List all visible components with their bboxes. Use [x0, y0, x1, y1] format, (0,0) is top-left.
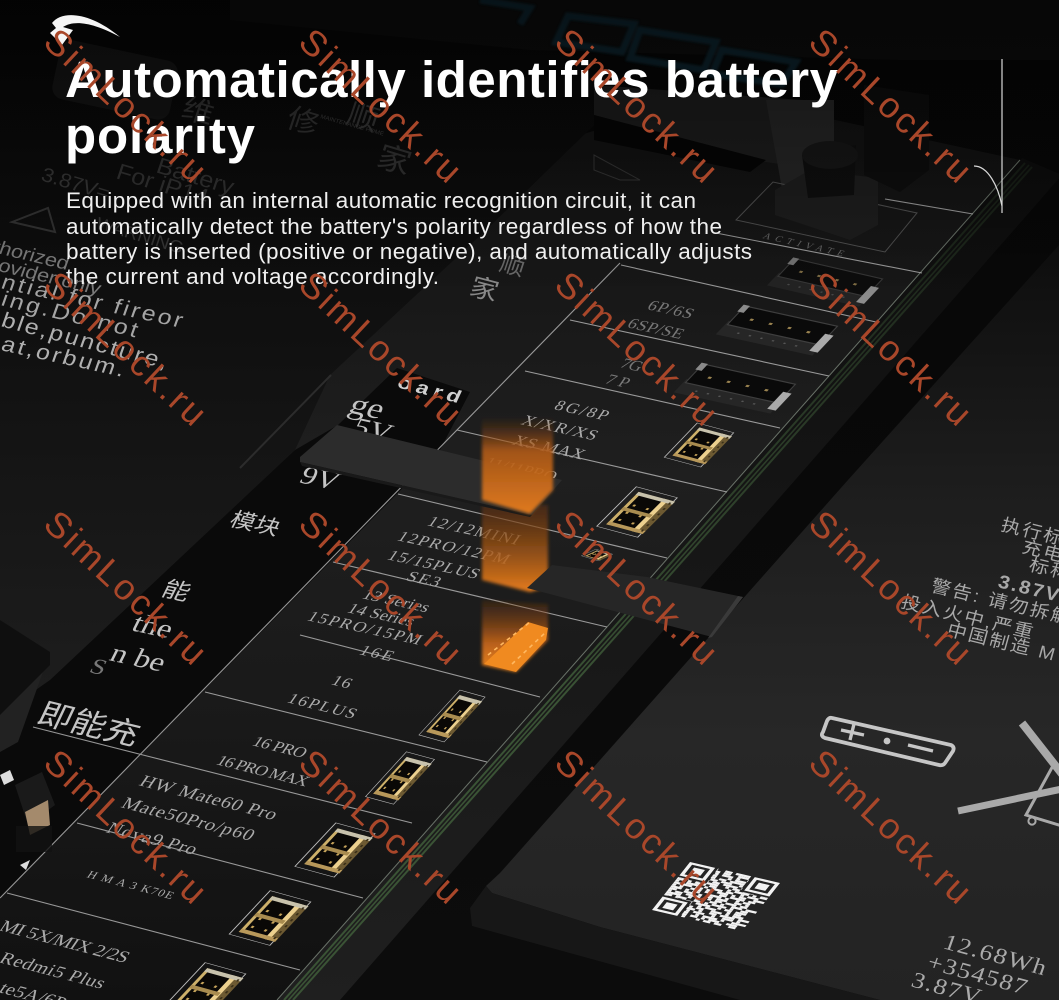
board text: phone model list: 16E — [356, 642, 398, 664]
watermark grid: SimLock.ru — [801, 263, 980, 434]
board text: phone model list: 16 PRO MAX — [213, 752, 313, 790]
connectors: gold battery sockets — [164, 423, 735, 1000]
icon: crossed-out bin — [958, 723, 1059, 826]
battery label: faint brand: Battery — [153, 153, 237, 200]
top fade over scene — [0, 0, 1059, 300]
panel: top device and display — [230, 0, 1059, 252]
button: activate — [736, 85, 929, 252]
board text: phone model list: 15PRO/15PM — [304, 608, 426, 648]
title: polarity — [65, 107, 256, 164]
panel: board side with green strip — [277, 158, 1059, 1000]
watermark grid: SimLock.ru — [291, 263, 470, 434]
board text: phone model list: 14 Series — [344, 600, 419, 630]
board text: phone model list: HW Mate60 Pro — [135, 772, 282, 824]
watermark grid: SimLock.ru — [36, 741, 215, 912]
strap: lower battery tab — [527, 565, 743, 638]
text block: description: automatically detect the battery's polarity regardless of how the — [66, 214, 722, 239]
battery label: ratings: +354587 — [924, 950, 1032, 1000]
watermark grid: SimLock.ru — [36, 502, 215, 673]
board text: phone model list: 16 — [328, 672, 356, 692]
battery label: warning text — [0, 237, 187, 381]
battery label: chinese text — [899, 514, 1059, 665]
battery label: faint brand: 维 — [178, 93, 218, 131]
battery label: faint brand: For iP14 — [113, 159, 212, 211]
panel: left black module area — [0, 368, 470, 898]
watermark grid: SimLock.ru — [291, 20, 470, 191]
board text: phone model list: 6SP/SE — [624, 315, 688, 342]
left module text: 模块 — [226, 508, 285, 540]
board text: phone model list — [0, 232, 846, 1000]
connectors: black battery sockets — [674, 257, 887, 414]
watermark grid: SimLock.ru — [547, 20, 726, 191]
connector: small SMD parts at left edge — [0, 770, 55, 870]
battery label: ratings — [908, 930, 1051, 1000]
watermark grid: SimLock.ru — [801, 20, 980, 191]
text block: description: the current and voltage accordingly. — [66, 264, 439, 289]
watermark grid: SimLock.ru — [547, 502, 726, 673]
board text: phone model list: XS MAX — [509, 432, 589, 463]
left module text: 能 — [158, 577, 195, 606]
left module text: 顺 — [496, 251, 528, 282]
board text: phone model list: 13 Series — [359, 586, 434, 616]
watermark grid — [36, 20, 980, 912]
watermark grid: SimLock.ru — [801, 502, 980, 673]
panel: lower right battery — [470, 245, 1059, 1000]
left module text: n be — [105, 638, 171, 677]
left module text: oard — [394, 373, 465, 407]
left module text: .5V — [340, 411, 398, 448]
strap: upper battery tab — [300, 425, 562, 517]
battery label: chinese text: 中国制造 M — [945, 619, 1059, 665]
battery label: chinese text: 投入火中,严重 — [899, 591, 1038, 643]
board text: phone model list: 16 PRO — [249, 733, 311, 761]
display digits — [480, 0, 796, 84]
left module text: 即能充 — [32, 697, 146, 752]
board text: phone model list: X/XR/XS — [518, 412, 602, 443]
logo: white swoosh — [50, 15, 120, 45]
battery label: faint brand: 3.87V= — [38, 164, 113, 205]
board text: phone model list: 15/15PLUS — [384, 547, 484, 582]
left module text: 家 — [466, 272, 502, 306]
left module text: 9V — [295, 461, 345, 496]
battery label: warning text: at,orbum. — [0, 331, 129, 381]
watermark grid: SimLock.ru — [291, 502, 470, 673]
battery label: warning text: ble,puncture, — [0, 308, 171, 373]
icon: polarity symbol — [822, 718, 954, 765]
battery label: ratings: 12.68Wh — [940, 930, 1051, 981]
watermark grid: SimLock.ru — [547, 741, 726, 912]
board text: phone model list: Mate50Pro/p60 — [117, 794, 259, 845]
board text: phone model list: 11/11PRO — [481, 454, 561, 485]
board text: phone model list: Nova9 Pro — [102, 819, 202, 859]
board text: phone model list: 7P — [602, 371, 634, 391]
battery label: faint brand: 家 — [373, 139, 416, 181]
orange highlight column: bottom with connector — [482, 600, 548, 672]
left module text: S — [86, 655, 111, 680]
left module text: the — [127, 608, 179, 644]
battery label: faint brand: 顺 — [343, 99, 383, 137]
watermark grid: SimLock.ru — [547, 263, 726, 434]
text block: description: battery is inserted (positive or negative), and automatically adjusts — [66, 239, 752, 264]
qr code — [651, 861, 781, 932]
board text: phone model list: ACTIVATE — [760, 232, 846, 259]
battery label: warning text: ntial for fireor — [0, 269, 187, 332]
watermark grid: SimLock.ru — [36, 263, 215, 434]
watermark grid: SimLock.ru — [291, 741, 470, 912]
board text: phone model list: H M A 3 K70E — [84, 868, 177, 901]
left module text: ge — [344, 389, 391, 426]
title — [65, 51, 839, 164]
panel: board printed grid lines — [0, 199, 973, 970]
battery label: warning text: ing.Do not — [0, 287, 142, 342]
board text: phone model list: 12PRO/12PM — [394, 528, 514, 567]
battery label: faint brand: 修 — [283, 103, 323, 141]
decor: right thin line with curve — [974, 59, 1002, 213]
battery label: faint brand: MAINTENANCE HOME — [319, 114, 384, 138]
text block: description: Equipped with an internal automatic recognition circuit, it can — [66, 188, 696, 213]
orange highlight column: middle — [482, 505, 548, 592]
board text: phone model list: 16PLUS — [284, 690, 361, 722]
panel: upper left battery — [0, 0, 620, 752]
board text: phone model list: SE3 — [403, 568, 445, 590]
text block: description — [66, 188, 752, 289]
board text: phone model list: 7G — [617, 355, 647, 375]
title: Automatically identifies battery — [65, 51, 839, 108]
watermark grid: SimLock.ru — [801, 741, 980, 912]
board text: phone model list: 12/12MINI — [424, 513, 525, 548]
left module text — [32, 251, 528, 752]
orange highlight column: top — [482, 417, 553, 514]
watermark grid: SimLock.ru — [36, 20, 215, 191]
board text: phone model list: 6P/6S — [644, 297, 698, 322]
battery label: faint brand: WARNING — [94, 214, 186, 257]
battery label: faint brand — [12, 38, 416, 257]
board text: phone model list: 8G/8P — [551, 397, 613, 424]
